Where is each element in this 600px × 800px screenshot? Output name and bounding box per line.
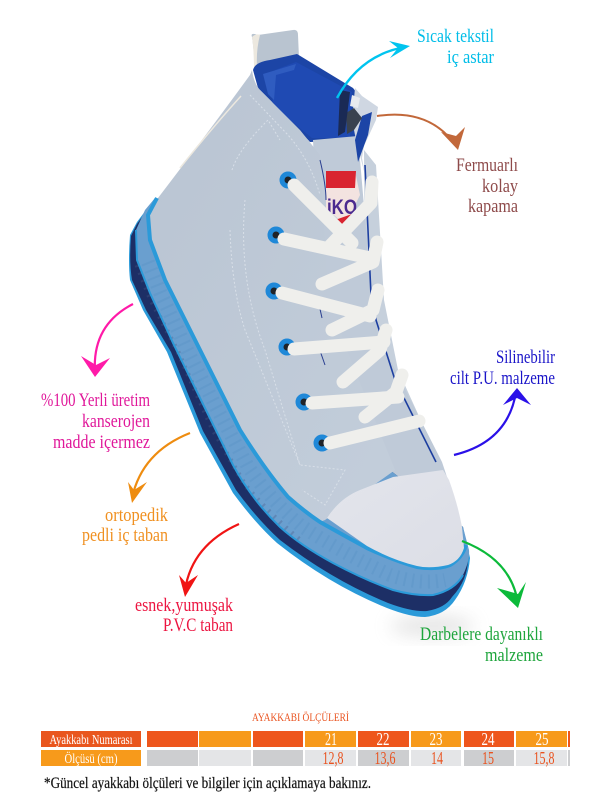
text: zipper: Fermuarlı (456, 155, 518, 176)
far side strip (364, 150, 448, 480)
row: shoe number: Ayakkabı Numarası (50, 733, 133, 748)
translucent midsole (136, 198, 469, 595)
row: size in cm: 13,6 (374, 748, 396, 768)
outsole (129, 198, 470, 617)
stitching (230, 95, 345, 505)
footnote: *Güncel ayakkabı ölçüleri ve bilgiler için açıklamaya bakınız. (44, 775, 371, 792)
text: PU material (450, 347, 556, 389)
laces (282, 182, 419, 443)
text: sole: esnek,yumuşak (135, 595, 233, 616)
text: durable material: Darbelere dayanıklı (420, 624, 543, 645)
upper body (150, 70, 395, 522)
brand label: iKO (327, 196, 357, 219)
row: shoe number: 21 (325, 729, 337, 749)
arrow: red (179, 524, 239, 597)
row: shoe number (41, 729, 570, 749)
table title: AYAKKABI ÖLÇÜLERİ (252, 710, 349, 724)
toe cap (327, 470, 464, 567)
row: shoe number: 23 (430, 729, 442, 749)
text: local production: madde içermez (53, 432, 150, 453)
text: local production: %100 Yerli üretim (41, 390, 150, 411)
text: zipper: kolay (482, 176, 518, 197)
row: shoe number: 24 (482, 729, 494, 749)
row: size in cm: 15,8 (534, 748, 554, 768)
zipper (338, 88, 378, 175)
row: size in cm: 14 (431, 748, 443, 768)
text: lining: iç astar (447, 47, 495, 68)
text: PU material: Silinebilir (496, 347, 556, 368)
arrow: orange (128, 433, 190, 503)
arrow: magenta (81, 304, 133, 377)
text: zipper (456, 155, 518, 217)
row: size in cm: 12,8 (322, 748, 344, 768)
text: insole: pedli iç taban (82, 525, 168, 546)
text: sole: P.V.C taban (163, 615, 233, 636)
row: shoe number: 22 (376, 729, 390, 749)
arrow: cyan lining (337, 41, 410, 98)
text: local production (41, 390, 150, 453)
row: size in cm: 15 (482, 748, 494, 768)
tongue (313, 136, 448, 490)
text: insole: ortopedik (105, 505, 168, 526)
outer edge highlight (180, 96, 241, 168)
arrow: brown zipper (377, 115, 465, 150)
midsole line (136, 230, 463, 595)
text: durable material: malzeme (485, 645, 543, 666)
row: shoe number: 25 (536, 729, 548, 749)
text: sole (135, 595, 233, 636)
ground shadow (390, 616, 474, 636)
shoe (129, 30, 474, 636)
arrow: green (462, 541, 526, 608)
text: insole (82, 505, 168, 546)
far side edge (365, 165, 436, 462)
brand label (326, 171, 357, 226)
sole top line (148, 198, 466, 568)
size table (41, 710, 570, 768)
text: lining: Sıcak tekstil (417, 26, 494, 47)
outsole texture (137, 265, 300, 540)
text: zipper: kapama (468, 196, 518, 217)
text: PU material: cilt P.U. malzeme (450, 368, 555, 389)
row: size in cm: Ölçüsü (cm) (64, 750, 118, 767)
blue inner lining (253, 54, 360, 142)
text: durable material (420, 624, 543, 666)
eyelets (268, 174, 328, 449)
heel pull tab (252, 30, 299, 72)
text: lining (417, 26, 495, 68)
text: local production: kanserojen (82, 411, 150, 432)
midsole texture (148, 262, 445, 582)
row: size in cm (41, 748, 570, 768)
arrow: blue (454, 388, 531, 455)
